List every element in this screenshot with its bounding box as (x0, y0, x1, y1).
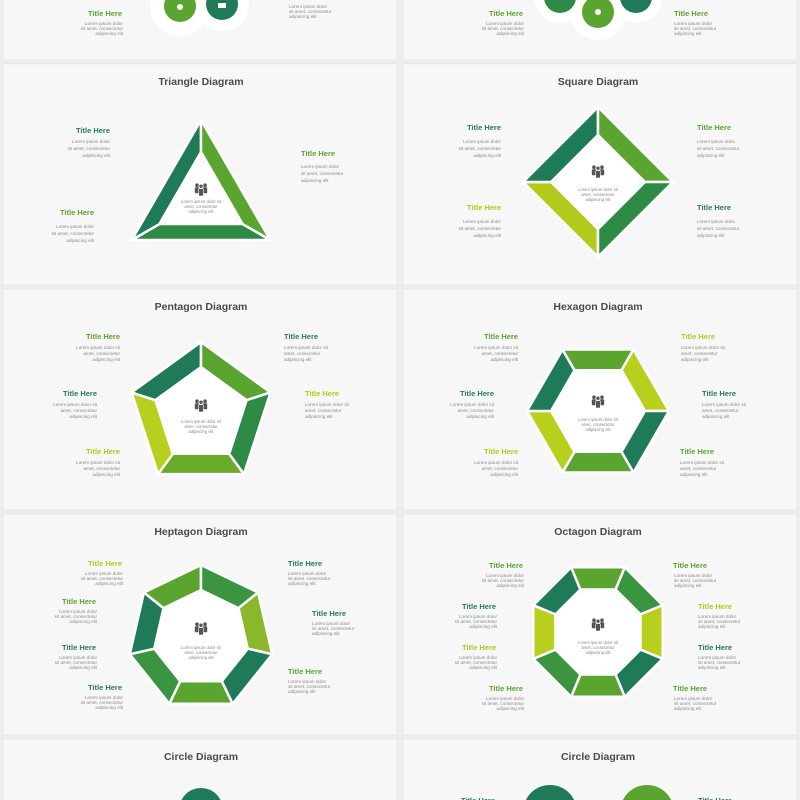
text block (702, 389, 747, 419)
text block: Title Here (288, 559, 322, 568)
text block (81, 9, 124, 36)
text block (81, 683, 124, 710)
text block (301, 149, 344, 183)
text block: adipiscing elit (92, 472, 121, 477)
text block: amet, consectetur (702, 408, 739, 413)
center text: Lorem ipsum dolor sit (181, 419, 222, 424)
text block (55, 597, 98, 624)
text block (474, 332, 519, 362)
text block: adipiscing elit (490, 357, 519, 362)
text block: Title Here (489, 684, 523, 693)
text block: Title Here (489, 561, 523, 570)
text block: adipiscing elit (496, 31, 525, 36)
text block: Title Here (702, 389, 736, 398)
text block: Lorem ipsum dolor (697, 139, 736, 144)
text block: Lorem ipsum dolor sit (450, 402, 495, 407)
text block: amet, consectetur (83, 466, 120, 471)
octagon chart (533, 567, 663, 697)
text block: adipiscing elit (69, 619, 98, 624)
text block: Title Here (86, 447, 120, 456)
text block (53, 389, 98, 419)
text block: adipiscing elit (698, 665, 726, 670)
text block: Title Here (312, 609, 346, 618)
text block: Lorem ipsum dolor (674, 573, 713, 578)
text block: adipiscing elit (680, 472, 708, 477)
text block (482, 684, 525, 711)
text block: sit amet, consectetur (81, 576, 123, 581)
text block: Title Here (305, 389, 339, 398)
text block: Lorem ipsum dolor (85, 571, 123, 576)
text block (450, 389, 495, 419)
text block: adipiscing elit (95, 581, 124, 586)
text block: Title Here (462, 643, 496, 652)
panel: square diagram (459, 76, 740, 257)
text block (288, 667, 331, 694)
text block: Lorem ipsum dolor (85, 695, 123, 700)
text block: Lorem ipsum dolor (674, 696, 713, 701)
text block: Title Here (76, 126, 110, 135)
text block: Title Here (462, 602, 496, 611)
text block (698, 602, 741, 629)
heading: Square Diagram (558, 76, 638, 88)
text block: sit amet, consectetur (674, 578, 717, 583)
text block: adipiscing elit (69, 414, 98, 419)
text block: adipiscing elit (69, 665, 98, 670)
text block: amet, consectetur (60, 408, 97, 413)
text block: Lorem ipsum dolor sit (284, 345, 329, 350)
text block: sit amet, consectetur (68, 146, 110, 151)
center text (181, 199, 222, 214)
text block (76, 447, 121, 477)
center text: Lorem ipsum dolor sit (578, 417, 619, 422)
text block: amet, consectetur (305, 408, 342, 413)
center text: adipiscing elit (188, 429, 214, 434)
text block: sit amet, consectetur (55, 614, 97, 619)
text block (76, 332, 121, 362)
icon: people (195, 183, 207, 196)
text block: amet, consectetur (284, 351, 321, 356)
text block: Title Here (680, 447, 714, 456)
text block: amet, consectetur (681, 351, 718, 356)
heading: Triangle Diagram (158, 76, 244, 88)
text block: Lorem ipsum dolor (85, 21, 123, 26)
text block: adipiscing elit (697, 153, 725, 158)
text block: Lorem ipsum dolor (486, 21, 524, 26)
text block: adipiscing elit (288, 581, 316, 586)
text block: Title Here (88, 9, 122, 18)
text block: Lorem ipsum dolor (459, 655, 497, 660)
center text: adipiscing elit (585, 650, 611, 655)
text block: sit amet, consectetur (698, 619, 741, 624)
text block (680, 447, 725, 477)
text block: Title Here (62, 643, 96, 652)
text block (673, 684, 717, 711)
text block: adipiscing elit (288, 689, 316, 694)
text block (461, 796, 732, 800)
text block: Lorem ipsum dolor (56, 224, 94, 229)
panel: circle diagram left (164, 751, 238, 800)
center text: Lorem ipsum dolor sit (578, 187, 619, 192)
text block: Lorem ipsum dolor sit (474, 345, 519, 350)
text block: sit amet, consectetur (674, 701, 717, 706)
text block: adipiscing elit (496, 583, 525, 588)
circles (523, 785, 674, 800)
text block: adipiscing elit (681, 357, 709, 362)
text block: Lorem ipsum dolor sit (305, 402, 350, 407)
text block: Lorem ipsum dolor sit (474, 460, 519, 465)
text block: adipiscing elit (674, 706, 702, 711)
text block: Lorem ipsum dolor (59, 609, 97, 614)
heading: Pentagon Diagram (155, 301, 247, 313)
panel: top-right partial circles (482, 0, 717, 40)
center text: adipiscing elit (585, 427, 611, 432)
pentagon chart (132, 342, 270, 474)
center text: adipiscing elit (585, 197, 611, 202)
text block: amet, consectetur (83, 351, 120, 356)
circles (150, 0, 249, 36)
icon: people (592, 618, 604, 631)
center text: adipiscing elit (188, 209, 214, 214)
text block (482, 561, 525, 588)
center text (578, 417, 619, 432)
text block: sit amet, consectetur (455, 660, 497, 665)
text block: Title Here (697, 203, 731, 212)
text block: adipiscing elit (473, 153, 502, 158)
text block: Title Here (674, 9, 708, 18)
text block: sit amet, consectetur (288, 576, 331, 581)
text block: adipiscing elit (66, 238, 95, 243)
text block: adipiscing elit (92, 357, 121, 362)
text block: adipiscing elit (469, 665, 498, 670)
text block: Title Here (698, 643, 732, 652)
text block: adipiscing elit (496, 706, 525, 711)
panel: hexagon diagram (450, 301, 747, 477)
center text: Lorem ipsum dolor sit (181, 645, 222, 650)
icon: people (592, 165, 604, 178)
heading: Circle Diagram (561, 751, 635, 763)
text block (697, 203, 740, 238)
center text: amet, consectetur (581, 645, 615, 650)
heading: Circle Diagram (164, 751, 238, 763)
text block (289, 4, 332, 19)
center text: Lorem ipsum dolor sit (181, 199, 222, 204)
text block: sit amet, consectetur (674, 26, 717, 31)
panel: circle diagram right (461, 751, 732, 800)
text block: amet, consectetur (680, 466, 717, 471)
text block: Title Here (698, 602, 732, 611)
text block: Lorem ipsum dolor (72, 139, 110, 144)
center text (181, 419, 222, 434)
text block (455, 643, 498, 670)
heptagon chart (130, 565, 272, 704)
panel: top-left partial circles (81, 0, 332, 36)
center text (578, 187, 619, 202)
panel: octagon diagram (455, 526, 741, 711)
text block: amet, consectetur (481, 466, 518, 471)
center text: Lorem ipsum dolor sit (578, 640, 619, 645)
text block: amet, consectetur (457, 408, 494, 413)
center text: amet, consectetur (184, 424, 218, 429)
text block: adipiscing elit (702, 414, 730, 419)
text block: adipiscing elit (95, 31, 124, 36)
text block: sit amet, consectetur (81, 26, 123, 31)
text block: adipiscing elit (82, 153, 111, 158)
text block: sit amet, consectetur (289, 9, 332, 14)
text block: Title Here (88, 683, 122, 692)
text block: Title Here (284, 332, 318, 341)
panel: heptagon diagram (55, 526, 355, 710)
text block: Lorem ipsum dolor (486, 573, 524, 578)
text block (81, 559, 124, 586)
text block: adipiscing elit (469, 624, 498, 629)
text block: adipiscing elit (697, 233, 725, 238)
text block: adipiscing elit (674, 31, 702, 36)
heading: Octagon Diagram (554, 526, 642, 538)
text block: Title Here (467, 203, 501, 212)
text block: Title Here (288, 667, 322, 676)
text block (681, 332, 726, 362)
text block: Title Here (697, 123, 731, 132)
text block (288, 559, 331, 586)
text block: Lorem ipsum dolor (288, 679, 327, 684)
text block: adipiscing elit (473, 233, 502, 238)
text block: Title Here (681, 332, 715, 341)
text block: sit amet, consectetur (482, 26, 524, 31)
text block (459, 123, 502, 158)
heading: Hexagon Diagram (553, 301, 643, 313)
center text: amet, consectetur (184, 650, 218, 655)
text block: sit amet, consectetur (697, 146, 740, 151)
circle (179, 788, 223, 800)
text block: sit amet, consectetur (482, 701, 524, 706)
text block: adipiscing elit (312, 631, 340, 636)
text block: adipiscing elit (466, 414, 495, 419)
text block: adipiscing elit (490, 472, 519, 477)
text block: Title Here (460, 389, 494, 398)
text block: sit amet, consectetur (697, 226, 740, 231)
text block: sit amet, consectetur (55, 660, 97, 665)
text block: sit amet, consectetur (698, 660, 741, 665)
text block: Title Here (301, 149, 335, 158)
text block: adipiscing elit (674, 583, 702, 588)
text block: Lorem ipsum dolor (459, 614, 497, 619)
text block: Title Here (489, 9, 523, 18)
hexagon chart (527, 350, 669, 472)
text block: Lorem ipsum dolor (463, 139, 501, 144)
text block: Lorem ipsum dolor (698, 614, 737, 619)
text block: sit amet, consectetur (482, 578, 524, 583)
text block: Lorem ipsum dolor sit (681, 345, 726, 350)
text block (55, 643, 98, 670)
text block: Lorem ipsum dolor (486, 696, 524, 701)
text block: sit amet, consectetur (301, 171, 344, 176)
text block: Title Here (63, 389, 97, 398)
text block: Lorem ipsum dolor sit (76, 460, 121, 465)
text block (52, 208, 95, 243)
text block: Lorem ipsum dolor (301, 164, 340, 169)
text block: adipiscing elit (301, 178, 329, 183)
text block: Lorem ipsum dolor (463, 219, 501, 224)
text block: Title Here (60, 208, 94, 217)
text block: Lorem ipsum dolor (697, 219, 736, 224)
text block: Title Here (484, 332, 518, 341)
square chart (523, 107, 673, 257)
text block (305, 389, 350, 419)
text block: adipiscing elit (284, 357, 312, 362)
triangle chart (132, 120, 270, 248)
text block (459, 203, 502, 238)
text block: sit amet, consectetur (81, 700, 123, 705)
text block: Lorem ipsum dolor (289, 4, 328, 9)
text block: Title Here (673, 561, 707, 570)
panel: pentagon diagram (53, 301, 350, 477)
text block: amet, consectetur (481, 351, 518, 356)
text block: Lorem ipsum dolor (288, 571, 327, 576)
text block (284, 332, 329, 362)
text block: Title Here (86, 332, 120, 341)
text block: Lorem ipsum dolor sit (680, 460, 725, 465)
icon: people (592, 395, 604, 408)
text block: Title Here (62, 597, 96, 606)
text block: sit amet, consectetur (455, 619, 497, 624)
text block: Lorem ipsum dolor (59, 655, 97, 660)
panel: triangle diagram (52, 76, 344, 248)
text block: sit amet, consectetur (288, 684, 331, 689)
text block (697, 123, 740, 158)
center text (181, 645, 222, 660)
text block (698, 643, 741, 670)
text block: Lorem ipsum dolor sit (76, 345, 121, 350)
center text: amet, consectetur (184, 204, 218, 209)
text block: Title Here (484, 447, 518, 456)
text block: sit amet, consectetur (52, 231, 94, 236)
text block: Lorem ipsum dolor (674, 21, 713, 26)
text block: adipiscing elit (289, 14, 317, 19)
text block (474, 447, 519, 477)
text block: Lorem ipsum dolor sit (53, 402, 98, 407)
text block: Lorem ipsum dolor sit (702, 402, 747, 407)
center text: amet, consectetur (581, 192, 615, 197)
text block (482, 9, 525, 36)
icon: people (195, 622, 207, 635)
center text: amet, consectetur (581, 422, 615, 427)
text block: sit amet, consectetur (459, 146, 501, 151)
text block: Lorem ipsum dolor (698, 655, 737, 660)
text block: adipiscing elit (95, 705, 124, 710)
text block (312, 609, 355, 636)
text block: Title Here (673, 684, 707, 693)
text block: sit amet, consectetur (459, 226, 501, 231)
center text: adipiscing elit (188, 655, 214, 660)
text block (673, 561, 717, 588)
circles (534, 0, 662, 40)
text block: adipiscing elit (698, 624, 726, 629)
text block (68, 126, 111, 158)
center text (578, 640, 619, 655)
heading: Heptagon Diagram (154, 526, 248, 538)
icon: people (195, 399, 207, 412)
text block: Title Here (88, 559, 122, 568)
text block: adipiscing elit (305, 414, 333, 419)
text block: sit amet, consectetur (312, 626, 355, 631)
text block: Lorem ipsum dolor (312, 621, 351, 626)
text block (674, 9, 717, 36)
text block: Title Here (467, 123, 501, 132)
text block (455, 602, 498, 629)
